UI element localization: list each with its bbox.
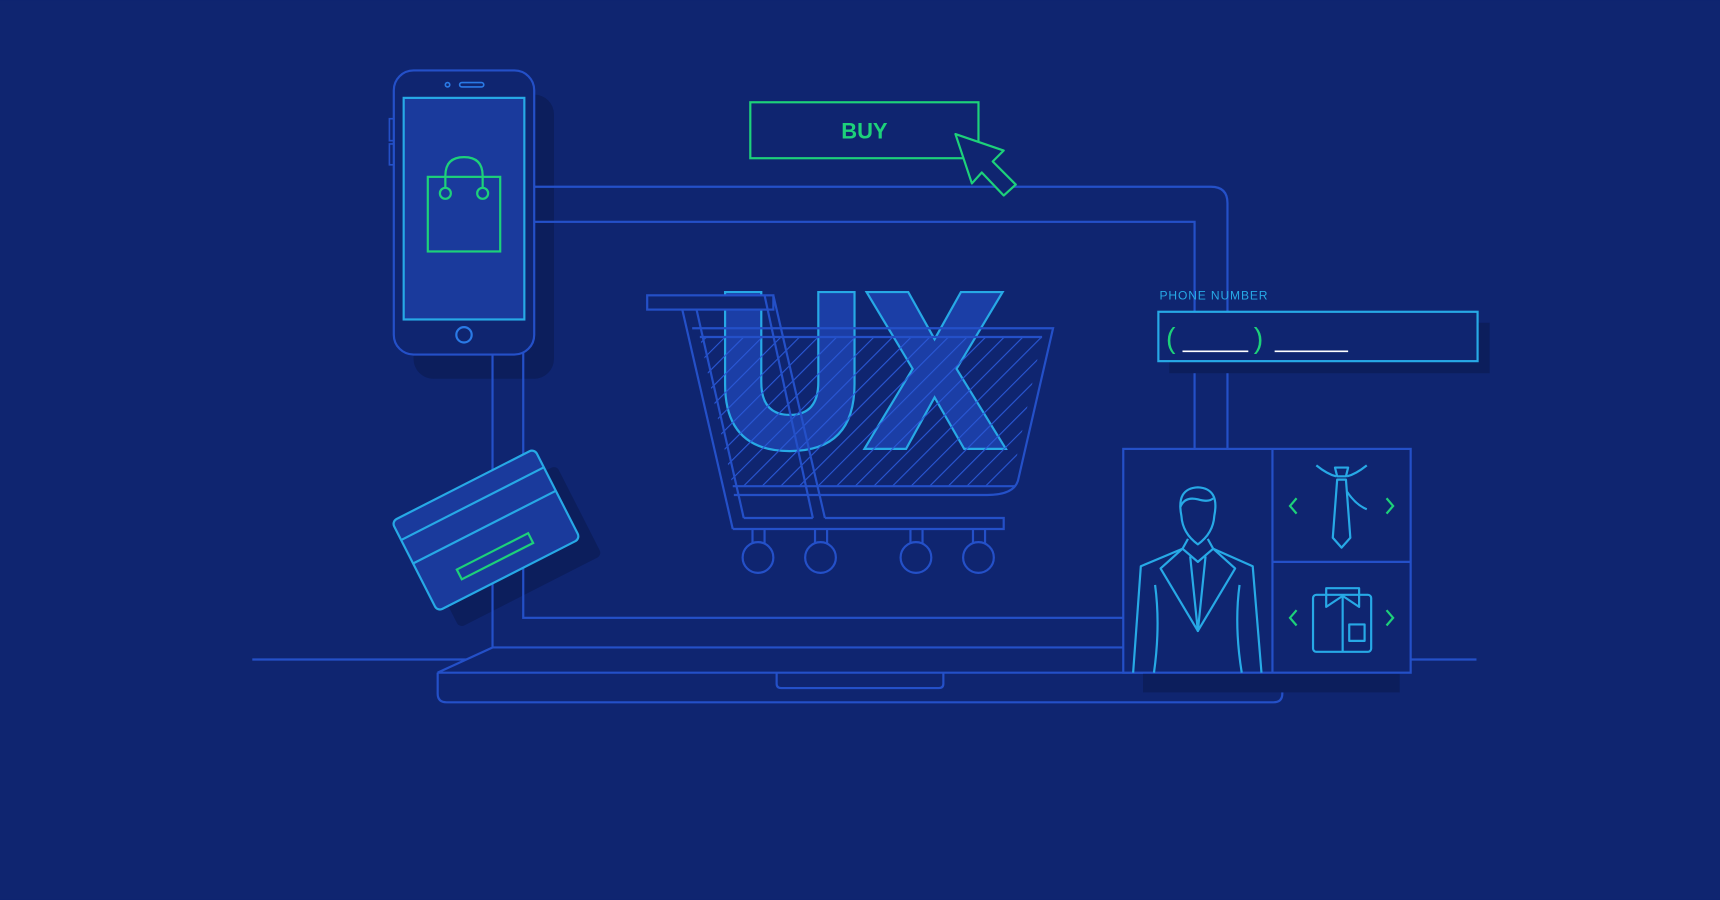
icon: tie (1316, 465, 1367, 548)
panel: product selector (1123, 449, 1411, 692)
phone (389, 70, 534, 355)
laptop (438, 187, 1282, 702)
phone number field (1158, 289, 1490, 373)
phone number field: ) (1254, 323, 1263, 355)
icon: shirt (1313, 588, 1371, 652)
UX cart (647, 292, 1053, 573)
credit card (392, 449, 580, 611)
card shadow (414, 465, 602, 628)
phone number field: ( (1166, 323, 1176, 355)
icon: cursor (955, 134, 1016, 196)
icon: man in suit (1133, 487, 1261, 673)
phone shadow (414, 95, 554, 379)
phone number field: PHONE NUMBER (1159, 289, 1268, 303)
icon: shopping bag (428, 157, 500, 251)
buy button: BUY (841, 118, 888, 143)
UX letters (725, 292, 1006, 451)
ground line (252, 659, 1476, 661)
arrows (1290, 498, 1393, 626)
buy button (750, 102, 978, 158)
